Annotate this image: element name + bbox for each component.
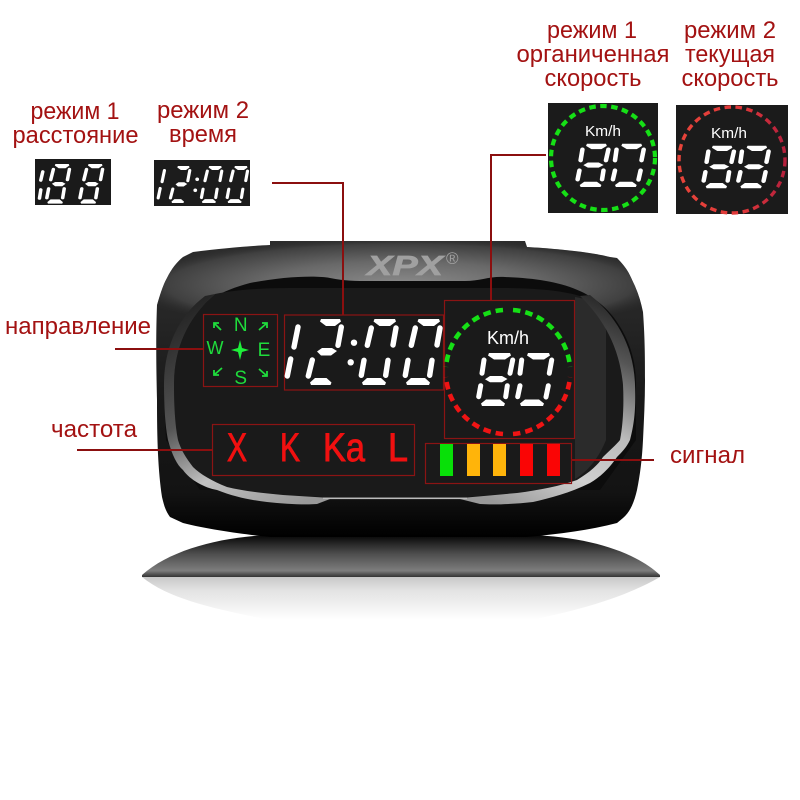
frequency panel: Ka (323, 426, 366, 470)
frequency panel: X (227, 426, 247, 470)
black channel (164, 277, 636, 490)
device reflection (142, 577, 660, 620)
distance mode label: расстояние (12, 122, 138, 149)
compass panel: S (234, 368, 247, 389)
mode 2 current speed display (676, 105, 788, 214)
limit speed mode label: органиченная (516, 41, 670, 68)
time mode label (157, 97, 249, 148)
limit speed mode label (516, 17, 670, 92)
green arc (446, 310, 570, 367)
device stand (142, 535, 660, 577)
speed digits (479, 353, 552, 406)
frequency panel (212, 424, 414, 476)
bottom bezel line (323, 498, 467, 499)
current speed mode label: скорость (682, 65, 778, 92)
compass panel (204, 314, 278, 389)
compass arrows (214, 323, 267, 376)
distance mode label (12, 98, 138, 149)
left bezel highlight (164, 294, 330, 504)
logo: XPX (364, 250, 446, 281)
time mode label: режим 2 (157, 97, 249, 124)
speed unit: Km/h (487, 328, 529, 348)
frequency label: частота (51, 416, 138, 443)
time mode label: время (169, 121, 237, 148)
frequency panel: L (388, 426, 408, 470)
time display panel (284, 315, 444, 390)
signal panel (426, 444, 572, 484)
signal label: сигнал (670, 442, 745, 469)
device body (156, 241, 645, 537)
current speed mode label (682, 17, 778, 92)
compass star (231, 340, 249, 360)
right bezel highlight (460, 295, 635, 504)
frequency panel: K (280, 426, 300, 470)
distance mode label: режим 1 (30, 98, 120, 125)
top shell highlight (157, 241, 643, 340)
current speed mode label: режим 2 (684, 17, 776, 44)
red arc (446, 377, 570, 434)
mode 1 limit speed display: Km/h (585, 123, 621, 140)
compass panel: N (234, 315, 248, 336)
direction label: направление (5, 313, 151, 340)
limit speed mode label: режим 1 (547, 17, 637, 44)
compass panel: E (258, 340, 270, 361)
lighter display panel (575, 297, 606, 479)
current speed mode label: текущая (685, 41, 775, 68)
connector lines (77, 155, 654, 460)
limit speed mode label: скорость (544, 65, 642, 92)
screen (174, 288, 623, 497)
mode 1 distance display (35, 159, 111, 205)
mode 2 current speed display: Km/h (711, 125, 747, 142)
speed panel (444, 300, 574, 438)
compass panel: W (206, 338, 224, 358)
registered mark: ® (446, 249, 459, 268)
mode 2 time display (154, 160, 250, 206)
mode 1 limit speed display (548, 103, 658, 213)
